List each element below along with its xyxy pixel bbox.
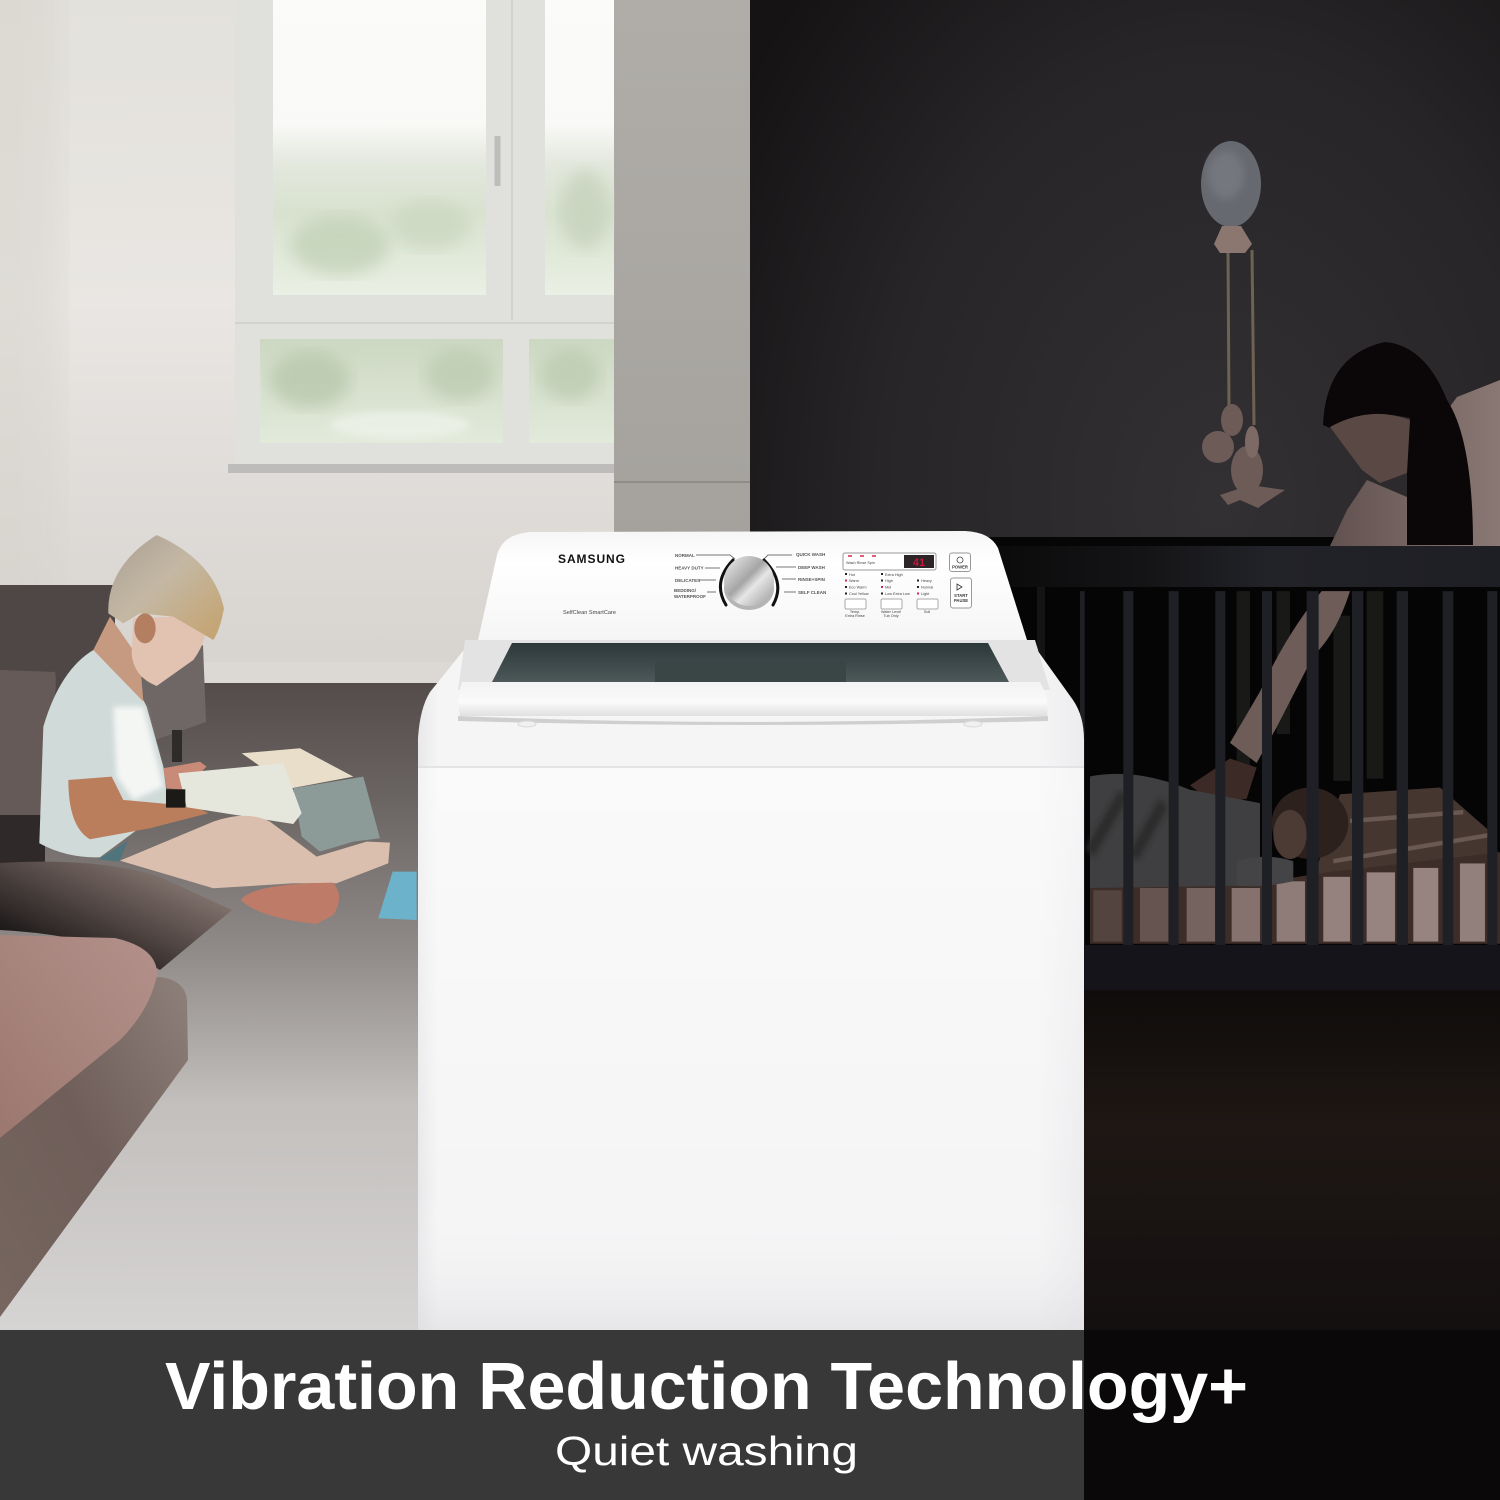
icon: hanging balloon mobile bbox=[1201, 141, 1261, 425]
panel: sleeping baby in crib bbox=[1080, 591, 1500, 948]
foot bbox=[241, 883, 339, 924]
sweater bbox=[1330, 380, 1500, 546]
subheading: Quiet washing bbox=[555, 1428, 858, 1474]
logo: SAMSUNG bbox=[558, 552, 625, 566]
start pause button: START bbox=[954, 593, 968, 598]
panel: mother leaning over crib bbox=[1323, 342, 1500, 546]
arm bbox=[68, 777, 208, 839]
neck bbox=[93, 617, 143, 702]
panel: bright living room background bbox=[0, 0, 750, 1330]
mattress panels bbox=[1093, 863, 1485, 942]
status display bbox=[843, 553, 936, 570]
feature text: SelfClean SmartCare bbox=[563, 610, 616, 616]
option button labels: Tub Only bbox=[883, 614, 899, 618]
water level options: High bbox=[885, 579, 893, 583]
lid handle bbox=[458, 682, 1048, 716]
cycle labels left: WATERPROOF bbox=[674, 594, 706, 599]
option button labels: Extra Rinse bbox=[845, 614, 865, 618]
lid glass bbox=[492, 643, 1009, 682]
book cover corner bbox=[166, 789, 185, 808]
stacked book bbox=[242, 748, 353, 788]
cycle labels right: DEEP WASH bbox=[798, 565, 825, 570]
cycle labels right: QUICK WASH bbox=[796, 552, 825, 557]
temperature options: Eco Warm bbox=[849, 586, 867, 590]
panel: crib rails bbox=[990, 537, 1500, 990]
cycle labels left bbox=[674, 553, 706, 599]
hand on book bbox=[163, 762, 207, 790]
cycle labels left: BEDDING/ bbox=[674, 588, 697, 593]
lid inset bbox=[655, 660, 846, 682]
face bbox=[1330, 414, 1410, 483]
water level options: Extra High bbox=[885, 573, 903, 577]
cabinet seam bbox=[418, 766, 1084, 768]
leg bbox=[120, 816, 390, 888]
panel: sofa and blanket bbox=[0, 585, 232, 1317]
back pillow under book bbox=[293, 777, 380, 852]
mother's arm bbox=[1230, 591, 1350, 763]
power button bbox=[950, 553, 970, 572]
panel: boy reading on the floor bbox=[39, 535, 417, 924]
water level options: Mid bbox=[885, 586, 891, 590]
cycle labels right: RINSE+SPIN bbox=[798, 577, 825, 582]
option buttons bbox=[845, 599, 938, 609]
soil options: Light bbox=[921, 592, 930, 596]
crib slats bbox=[1080, 591, 1497, 948]
icon: plush giraffe toy bbox=[1202, 404, 1285, 508]
open book bbox=[178, 763, 302, 824]
mattress shadow bbox=[1090, 852, 1500, 944]
blanket bbox=[1313, 788, 1500, 879]
option button labels bbox=[845, 610, 930, 618]
status display: 41 bbox=[913, 557, 925, 569]
bedding bbox=[1090, 774, 1260, 888]
temperature options bbox=[845, 573, 869, 596]
shirt bbox=[39, 650, 168, 857]
water level options: Low Extra Low bbox=[885, 592, 910, 596]
cycle leader lines bbox=[696, 555, 796, 592]
mother's hand bbox=[1190, 759, 1257, 803]
handle shadow bbox=[458, 716, 1048, 725]
start pause button bbox=[950, 578, 972, 608]
option button labels: Soil bbox=[924, 610, 930, 614]
cycle labels left: NORMAL bbox=[675, 553, 695, 558]
cycle labels left: DELICATES bbox=[675, 578, 700, 583]
baby's face bbox=[1273, 810, 1307, 859]
blue book bbox=[378, 872, 417, 920]
crib interior bands bbox=[1237, 591, 1383, 781]
option button labels: Temp. bbox=[850, 610, 860, 614]
hair bbox=[1323, 342, 1473, 545]
baby's arm bbox=[1237, 857, 1293, 886]
hair bbox=[108, 535, 224, 640]
panel: window bbox=[228, 0, 614, 473]
panel: top-load washer bbox=[418, 531, 1084, 1335]
power button: POWER bbox=[952, 564, 968, 570]
shorts bbox=[98, 841, 128, 862]
panel: caption banner bbox=[0, 1330, 1500, 1500]
soil options: Heavy bbox=[921, 579, 932, 583]
baby's head bbox=[1272, 788, 1348, 859]
face bbox=[132, 617, 207, 686]
soil options: Normal bbox=[921, 586, 933, 590]
washer cabinet bbox=[418, 640, 1084, 1335]
start pause button: PAUSE bbox=[954, 598, 968, 603]
control panel housing bbox=[478, 531, 1027, 640]
bedding folds bbox=[1090, 794, 1163, 857]
cycle dial arc bbox=[720, 560, 778, 605]
temperature options: Cool Yellow bbox=[849, 592, 869, 596]
cycle labels right bbox=[796, 552, 826, 595]
cycle dial knob bbox=[724, 556, 774, 610]
lid frame bbox=[458, 640, 1050, 690]
soil options bbox=[917, 579, 933, 596]
ear bbox=[134, 613, 156, 643]
lid hinges bbox=[518, 721, 982, 727]
blanket stripes bbox=[1323, 812, 1500, 877]
temperature options: Hot bbox=[849, 573, 856, 577]
panel: dark nursery background bbox=[750, 0, 1500, 1330]
water level options bbox=[881, 573, 910, 596]
status display: Wash Rinse Spin bbox=[846, 561, 875, 565]
cabinet shading bbox=[418, 768, 1084, 1335]
option button labels: Water Level bbox=[881, 610, 901, 614]
cycle labels left: HEAVY DUTY bbox=[675, 566, 704, 570]
shirt highlight bbox=[113, 707, 163, 800]
panel: concrete pillar bbox=[614, 0, 750, 535]
heading: Vibration Reduction Technology+ bbox=[165, 1349, 1248, 1424]
temperature options: Warm bbox=[849, 579, 859, 583]
cycle labels right: SELF CLEAN bbox=[798, 590, 826, 595]
